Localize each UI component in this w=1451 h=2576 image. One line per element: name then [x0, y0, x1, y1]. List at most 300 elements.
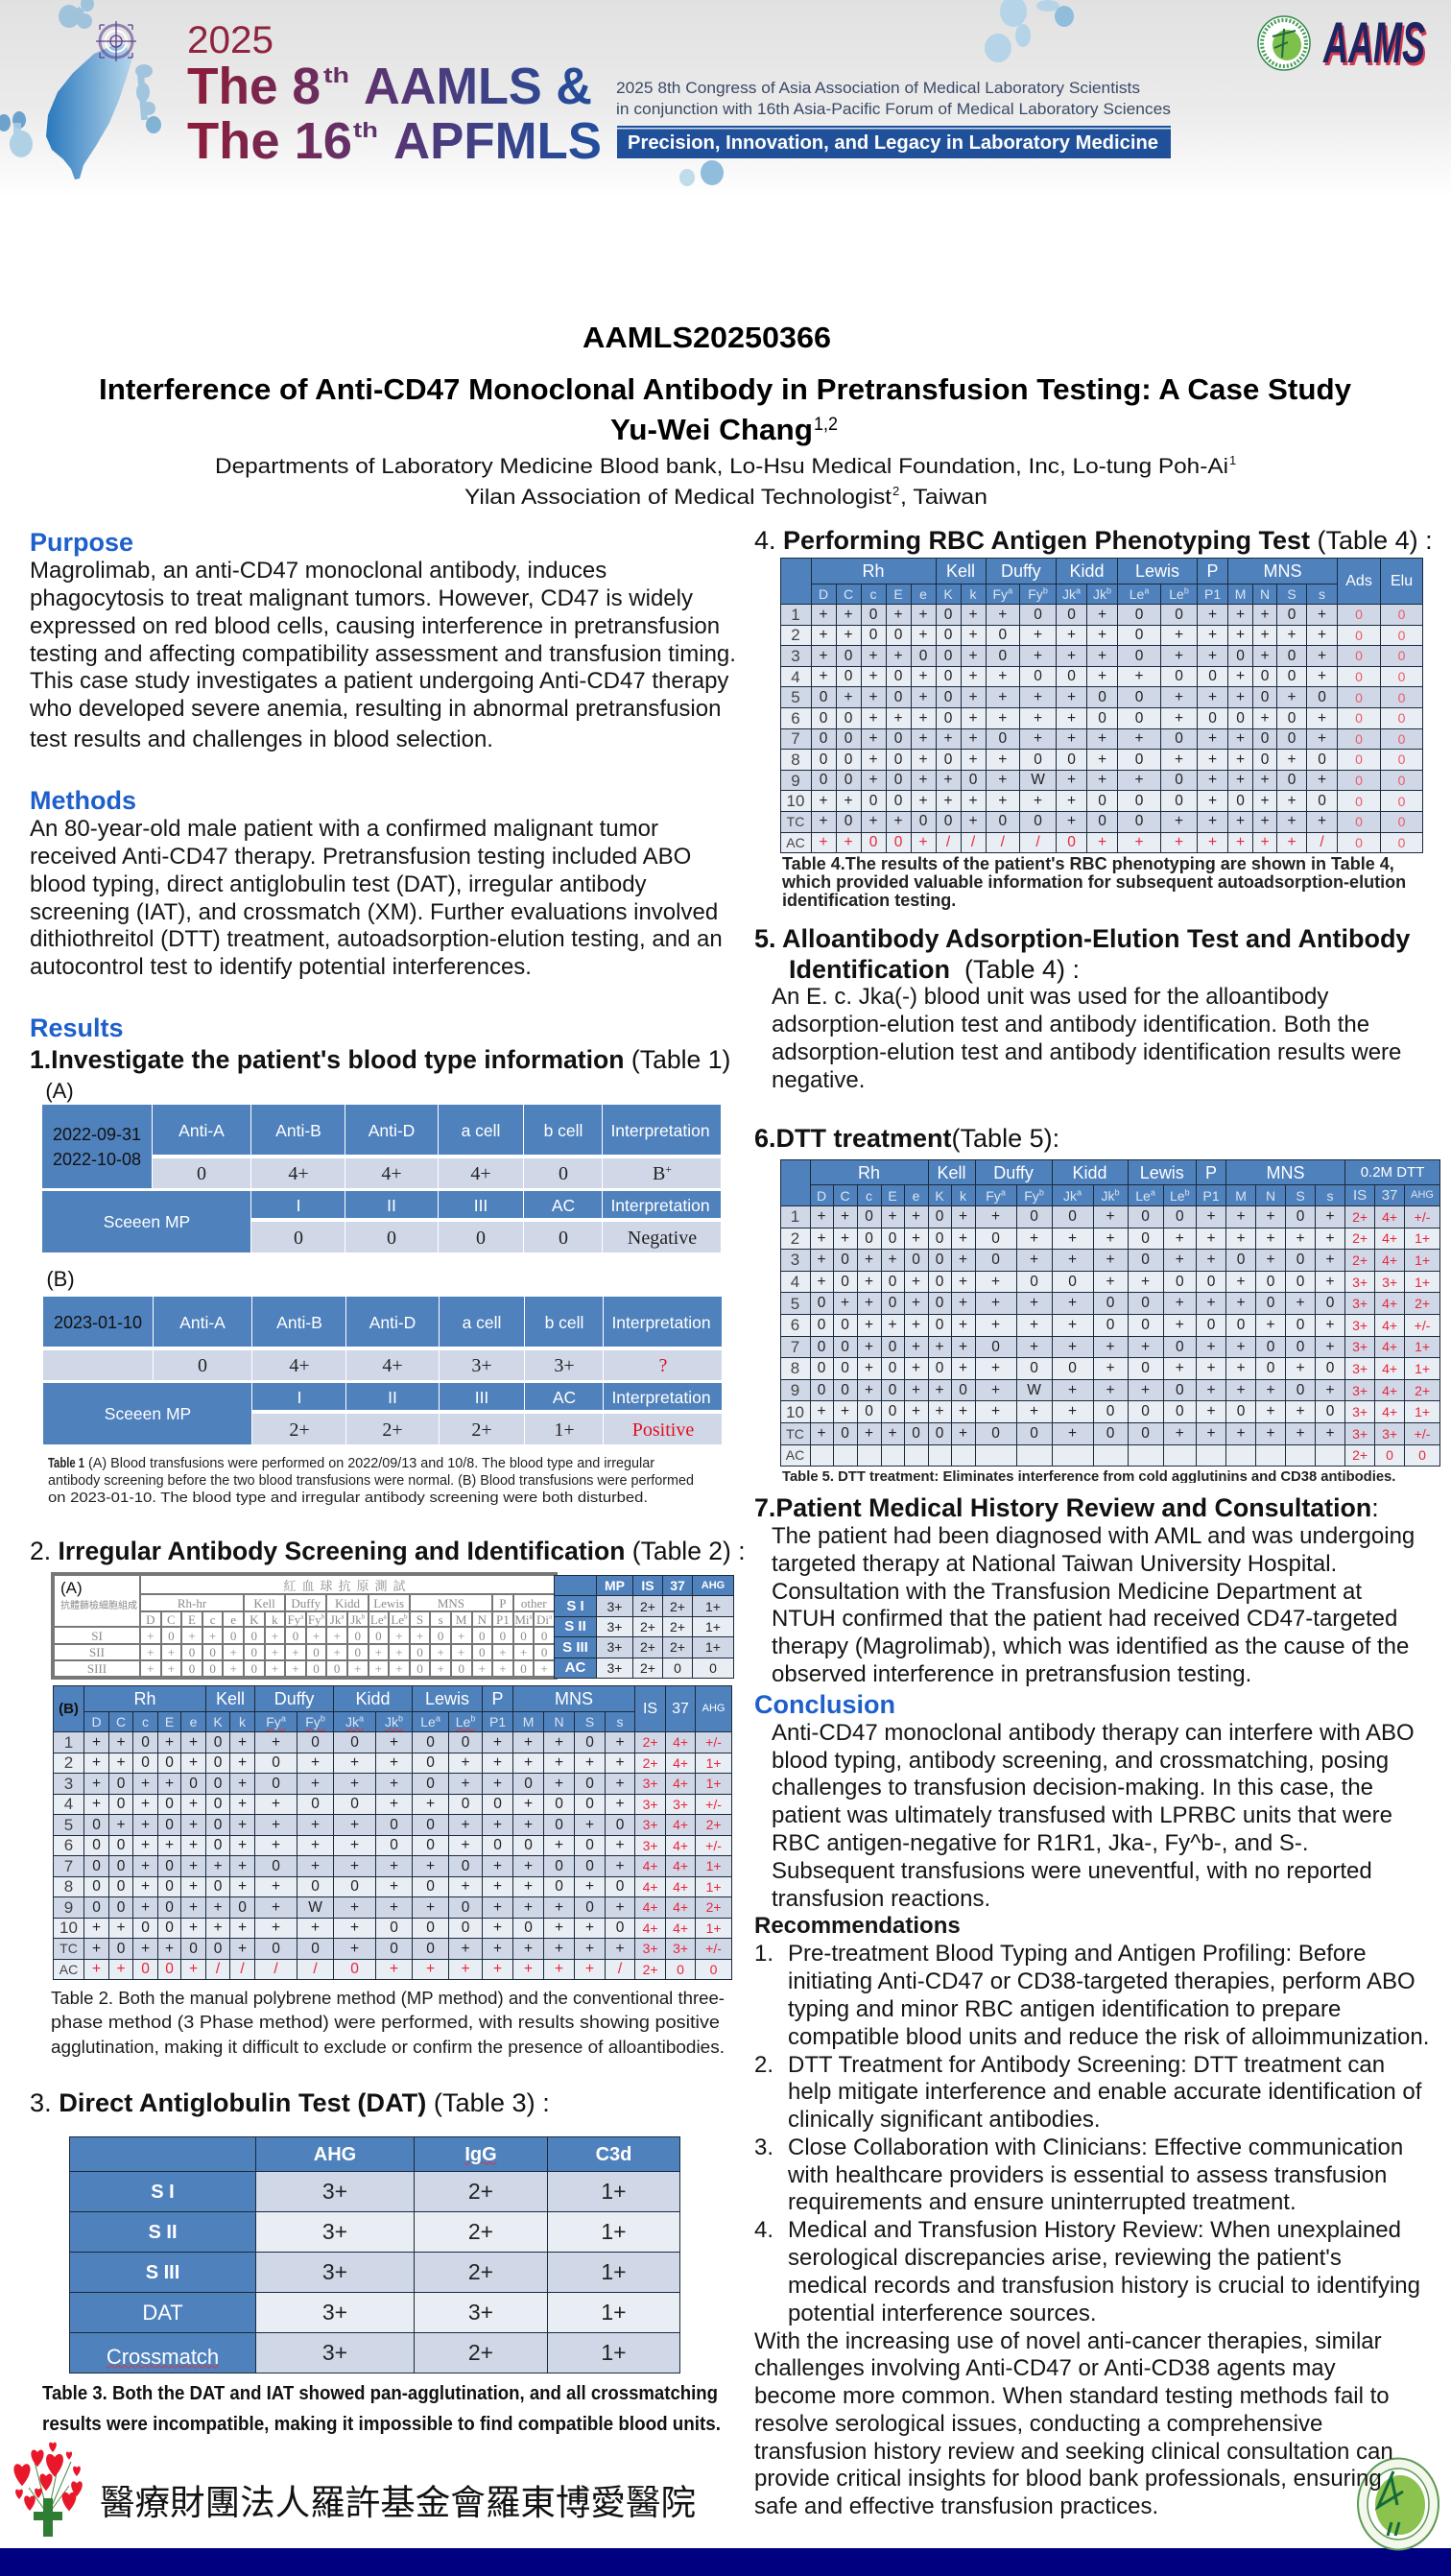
- table 4: RBC antigen phenotyping: +: [1175, 627, 1183, 643]
- table 4: RBC antigen phenotyping: 0: [944, 689, 952, 705]
- table 2B: antibody identification panel: 2+: [643, 1962, 658, 1977]
- text: closing paragraph: become more common. When standard testing methods fail to: [754, 2383, 1390, 2409]
- table 4: RBC antigen phenotyping: 0: [1398, 710, 1405, 726]
- affiliations: Yilan Association of Medical Technologist: [464, 485, 892, 509]
- table 5: DTT treatment: +: [1326, 1252, 1335, 1268]
- table 4: RBC antigen phenotyping: /: [971, 834, 975, 850]
- table 4: RBC antigen phenotyping: 0: [1135, 813, 1143, 829]
- table 2B: antibody identification panel: +: [555, 1776, 563, 1791]
- table 1B: 2023-01-10: [54, 1313, 142, 1332]
- theme banner: [617, 126, 1171, 158]
- table 4: RBC antigen phenotyping: +: [1175, 648, 1183, 664]
- table 5: DTT treatment: 0: [1267, 1339, 1274, 1355]
- table 4: RBC antigen phenotyping: 0: [820, 689, 827, 705]
- table 2A: screening cell results: 2+: [670, 1599, 685, 1614]
- table 2B: antibody identification panel: 0: [165, 1816, 174, 1833]
- table 2B: antibody identification panel: +: [116, 1816, 126, 1833]
- table 3: direct antiglobulin test: AHG: [314, 2144, 356, 2165]
- table 2B: antibody identification panel: 0: [710, 1962, 717, 1977]
- table 4: RBC antigen phenotyping: 6: [791, 709, 800, 727]
- table 5: DTT treatment: 0: [936, 1208, 943, 1225]
- table 2B: antibody identification panel: +: [272, 1796, 280, 1812]
- table 4: RBC antigen phenotyping: D: [819, 586, 828, 602]
- table 3: direct antiglobulin test: DAT: [142, 2300, 183, 2325]
- table 4: RBC antigen phenotyping: +: [844, 627, 853, 643]
- table 5: DTT treatment: +: [1106, 1230, 1115, 1247]
- table 5: DTT treatment: +: [912, 1208, 920, 1225]
- table 4: RBC antigen phenotyping: 0: [919, 648, 927, 664]
- table 5: DTT treatment: 1+: [1415, 1275, 1430, 1290]
- table 4: RBC antigen phenotyping: 0: [844, 710, 852, 727]
- table 2B: antibody identification panel: 0: [214, 1796, 222, 1812]
- table 4: RBC antigen phenotyping: 0: [894, 793, 902, 809]
- table 5: DTT treatment: +: [1267, 1252, 1275, 1268]
- recommendation 3: Close Collaboration with Clinicians: Effective communication: [788, 2135, 1403, 2160]
- table 5: DTT treatment: +: [865, 1339, 873, 1355]
- table 5: DTT treatment: Lea: [1135, 1187, 1155, 1204]
- table 4: RBC antigen phenotyping: 0: [998, 648, 1007, 664]
- table 2B: antibody identification panel: +: [524, 1816, 533, 1833]
- table 2B: antibody identification panel: +: [92, 1941, 101, 1956]
- text: conclusion body: challenges to transfusion decision-making. In this case, the: [772, 1775, 1373, 1801]
- table 2B: antibody identification panel: TC: [59, 1941, 78, 1956]
- table 2B: antibody identification panel: +: [524, 1878, 533, 1895]
- table 5: DTT treatment: +: [1207, 1425, 1216, 1442]
- table 4: RBC antigen phenotyping: +: [944, 793, 953, 809]
- table 2A: scanned antigen panel: 0: [209, 1645, 216, 1659]
- table 1A: Anti-D: [369, 1121, 415, 1140]
- table 2A: screening cell results: 3+: [607, 1660, 622, 1676]
- table 2A: scanned antigen panel: +: [354, 1661, 361, 1676]
- table 4: RBC antigen phenotyping: +: [1135, 834, 1144, 850]
- text: section 7 body: The patient had been diagnosed with AML and was undergoing: [772, 1523, 1415, 1549]
- table 4: RBC antigen phenotyping: 0: [1034, 607, 1042, 623]
- table 5: DTT treatment: 0: [1237, 1317, 1245, 1333]
- recommendation 4: [754, 2217, 1420, 2326]
- table 5: DTT treatment: +: [1176, 1360, 1184, 1376]
- icon: Taiwan island: [46, 44, 132, 179]
- table 5: DTT treatment: MNS: [1267, 1163, 1305, 1182]
- table 2B: antibody identification panel: 0: [524, 1776, 533, 1791]
- table 5: DTT treatment: 4+: [1382, 1361, 1397, 1376]
- table 2A: screening cell results: 3+: [607, 1639, 622, 1655]
- table 4: RBC antigen phenotyping: +: [868, 751, 878, 768]
- table 2B: antibody identification panel: 0: [426, 1776, 435, 1791]
- table 2B: antibody identification panel: 0: [214, 1837, 222, 1853]
- author: Yu-Wei Chang: [610, 414, 813, 446]
- table 4: RBC antigen phenotyping: 0: [944, 607, 952, 623]
- table 4: RBC antigen phenotyping: 0: [1208, 668, 1217, 684]
- table 5: DTT treatment: +: [1237, 1360, 1246, 1376]
- table 4: RBC antigen phenotyping: +: [1067, 730, 1076, 747]
- table 2B: antibody identification panel: +: [390, 1878, 398, 1895]
- table 2A: scanned antigen panel: +: [437, 1645, 444, 1659]
- table 5: DTT treatment: +: [959, 1230, 967, 1247]
- table 4: RBC antigen phenotyping: +: [1288, 813, 1296, 829]
- table 2B: antibody identification panel: +: [92, 1733, 101, 1751]
- table 2B: antibody identification panel: +: [493, 1920, 502, 1936]
- table 3: direct antiglobulin test: 2+: [468, 2219, 493, 2244]
- table 4: RBC antigen phenotyping: 0: [1067, 607, 1076, 623]
- table 2B: antibody identification panel: +: [616, 1858, 625, 1873]
- table 1A: Anti-B: [275, 1121, 321, 1140]
- table 2B: antibody identification panel: +: [189, 1878, 198, 1895]
- table 2B: antibody identification panel: 0: [555, 1878, 563, 1895]
- table 5: DTT treatment: 0: [1296, 1252, 1304, 1268]
- table 4: RBC antigen phenotyping: C: [844, 586, 853, 602]
- table 4: RBC antigen phenotyping: 0: [1098, 710, 1106, 727]
- table 5: DTT treatment: 0: [865, 1208, 873, 1225]
- table 2B: antibody identification panel: +: [524, 1754, 533, 1771]
- table 2B: antibody identification panel: +: [616, 1796, 625, 1812]
- table 4: RBC antigen phenotyping: +: [1098, 668, 1106, 684]
- table 2B: antibody identification panel: +: [141, 1941, 150, 1956]
- table 5: DTT treatment: 0: [1326, 1403, 1334, 1419]
- table 2B: antibody identification panel: +: [92, 1920, 101, 1936]
- table 5: DTT treatment: +: [1030, 1230, 1038, 1247]
- table 2B: antibody identification panel: +: [524, 1898, 533, 1916]
- table 1B: I: [297, 1388, 301, 1407]
- table 2B: antibody identification panel: 4+: [673, 1920, 688, 1936]
- table 2B: antibody identification panel: +: [311, 1816, 320, 1833]
- table 2B: antibody identification panel: 0: [141, 1961, 150, 1977]
- table 2B: antibody identification panel: Lewis: [425, 1689, 469, 1708]
- table 4: RBC antigen phenotyping: +: [1098, 730, 1106, 747]
- table 1A: 2022-09-31: [53, 1125, 141, 1144]
- table 2B: antibody identification panel: 0: [214, 1941, 222, 1956]
- table 2A: scanned antigen panel: (A): [60, 1579, 83, 1597]
- table 2B: antibody identification panel: 2: [64, 1753, 73, 1772]
- text: methods body: screening (IAT), and crossmatch (XM). Further evaluations involved: [30, 899, 718, 925]
- table 2B: antibody identification panel: +: [350, 1941, 359, 1956]
- table 2A: scanned antigen panel: 0: [251, 1628, 257, 1643]
- text: conclusion body: transfusion reactions.: [772, 1886, 990, 1912]
- table 5: DTT treatment: +: [912, 1382, 920, 1398]
- table 4: RBC antigen phenotyping: +: [969, 813, 978, 829]
- table 4: RBC antigen phenotyping: 0: [1398, 690, 1405, 705]
- table 5: DTT treatment: +/-: [1415, 1209, 1430, 1225]
- table 2A: scanned antigen panel: k: [272, 1612, 278, 1626]
- table 2A: scanned antigen panel: Rh-hr: [178, 1595, 206, 1610]
- table 5: DTT treatment: +: [1326, 1425, 1335, 1442]
- table 4: RBC antigen phenotyping: 0: [844, 730, 852, 747]
- table 5: DTT treatment: +: [865, 1382, 873, 1398]
- table 4: RBC antigen phenotyping: 0: [1318, 793, 1326, 809]
- table 2B: antibody identification panel: +: [493, 1754, 502, 1771]
- table 2A: scanned antigen panel: 0: [416, 1645, 423, 1659]
- table 4: RBC antigen phenotyping: +: [1034, 689, 1042, 705]
- table 5: DTT treatment: +: [912, 1403, 920, 1419]
- table 2A: scanned antigen panel: SI: [91, 1628, 103, 1643]
- table 2A: scanned antigen panel: S: [416, 1612, 423, 1626]
- table 2B: antibody identification panel: 0: [616, 1816, 624, 1833]
- table 2B: antibody identification panel: 0: [585, 1733, 594, 1751]
- table 2B: antibody identification panel: 0: [462, 1898, 469, 1916]
- text: section 5 body: [772, 984, 1401, 1093]
- heading: section 2: 2. Irregular Antibody Screening and Identification (Table 2) :: [30, 1537, 746, 1565]
- table 2B: antibody identification panel: +: [350, 1816, 359, 1833]
- table 1A: AC: [552, 1196, 575, 1215]
- table 5: DTT treatment: +: [1237, 1339, 1246, 1355]
- table 1B: 3+: [471, 1355, 492, 1376]
- table 2B: antibody identification panel: 0: [350, 1796, 359, 1812]
- table 5: DTT treatment: 0: [1207, 1317, 1215, 1333]
- table 4: RBC antigen phenotyping: +: [1135, 668, 1144, 684]
- table 4: RBC antigen phenotyping: +: [1208, 772, 1217, 788]
- table 5: DTT treatment: 0: [1176, 1382, 1184, 1398]
- table 5: DTT treatment: 0: [936, 1230, 943, 1247]
- table 1A: +: [665, 1162, 672, 1176]
- table 4: RBC antigen phenotyping: 8: [791, 751, 800, 769]
- table 2B: antibody identification panel: +: [92, 1796, 101, 1812]
- table 2B: antibody identification panel: 4+: [643, 1920, 658, 1936]
- table 5: DTT treatment: +: [1326, 1317, 1335, 1333]
- recommendation 4: potential interference sources.: [788, 2301, 1097, 2326]
- table 4: RBC antigen phenotyping: W: [1031, 772, 1045, 788]
- table 2B: antibody identification panel: 3+: [643, 1817, 658, 1832]
- table 2B: antibody identification panel: 0: [214, 1776, 222, 1791]
- table 5: DTT treatment: +: [1326, 1230, 1335, 1247]
- table 5: DTT treatment: +: [1068, 1425, 1077, 1442]
- table 5: DTT treatment: +: [991, 1382, 1000, 1398]
- table 2A: scanned antigen panel: 0: [354, 1628, 361, 1643]
- table 2B: antibody identification panel: +: [238, 1878, 247, 1895]
- heading: section 5: [754, 924, 1411, 984]
- table 2B: antibody identification panel: 0: [214, 1754, 222, 1771]
- table 4: RBC antigen phenotyping: +: [969, 648, 978, 664]
- table 4: RBC antigen phenotyping: 0: [1135, 689, 1143, 705]
- table 5: DTT treatment: +: [1068, 1339, 1077, 1355]
- table 2A: screening cell results: 2+: [640, 1619, 655, 1634]
- table 2B: antibody identification panel: 4+: [673, 1755, 688, 1771]
- table 2A: scanned antigen panel: +: [437, 1661, 444, 1676]
- table 2A: scanned antigen panel: 0: [479, 1628, 486, 1643]
- table 4: RBC antigen phenotyping: +: [868, 710, 878, 727]
- table 5: DTT treatment: 3+: [1352, 1296, 1368, 1311]
- recommendation 2: clinically significant antibodies.: [788, 2107, 1100, 2133]
- table 2A: scanned antigen panel: +: [230, 1661, 237, 1676]
- table 2B: antibody identification panel: /: [313, 1961, 318, 1977]
- text: section 5 body: adsorption-elution test and antibody identification results were: [772, 1039, 1401, 1065]
- table 2B: antibody identification panel: 4+: [673, 1899, 688, 1915]
- table 5: DTT treatment: W: [1027, 1382, 1041, 1398]
- table 2A: scanned antigen panel: [53, 1574, 556, 1678]
- table 5: DTT treatment: 1+: [1415, 1252, 1430, 1268]
- table 2A: scanned antigen panel: SII: [89, 1645, 105, 1659]
- table 4: RBC antigen phenotyping: 0: [1355, 814, 1363, 829]
- table 5: DTT treatment: 8: [791, 1359, 799, 1377]
- table 4: RBC antigen phenotyping: +: [918, 668, 928, 684]
- title block: [99, 321, 1351, 509]
- table 1B: Sceeen MP: [105, 1404, 191, 1423]
- table 4: RBC antigen phenotyping: +: [1034, 710, 1042, 727]
- table 5: DTT treatment: +: [959, 1317, 967, 1333]
- table 2B: antibody identification panel: +/-: [705, 1941, 722, 1956]
- table 4: RBC antigen phenotyping: +: [868, 772, 878, 788]
- table 2A: scanned antigen panel: 抗體篩檢細胞組成: [60, 1597, 137, 1611]
- table 2B: antibody identification panel: +: [92, 1961, 101, 1977]
- table 4: RBC antigen phenotyping: 9: [791, 772, 800, 790]
- conference year: 2025: [187, 19, 274, 61]
- table 2B: antibody identification panel: +: [585, 1920, 594, 1936]
- table 4: RBC antigen phenotyping: 0: [1135, 648, 1143, 664]
- table 2B: antibody identification panel: +: [116, 1920, 126, 1936]
- table 4: RBC antigen phenotyping: 5: [791, 688, 800, 706]
- table 4: RBC antigen phenotyping: +: [1318, 648, 1326, 664]
- table 2B: antibody identification panel: +: [238, 1796, 247, 1812]
- table 2A: scanned antigen panel: +: [272, 1628, 278, 1643]
- text: section 7 body: NTUH confirmed that the patient had received CD47-targeted: [772, 1606, 1397, 1632]
- table 4: RBC antigen phenotyping: 0: [1398, 607, 1405, 622]
- table 5: DTT treatment: 4+: [1382, 1209, 1397, 1225]
- table 4: RBC antigen phenotyping: +: [1318, 668, 1326, 684]
- table 4: RBC antigen phenotyping: 0: [1398, 648, 1405, 663]
- table 4: RBC antigen phenotyping: 0: [1175, 607, 1183, 623]
- table 2B: antibody identification panel: 0: [350, 1961, 359, 1977]
- table 4: RBC antigen phenotyping: +: [868, 730, 878, 747]
- table 2A: scanned antigen panel: E: [188, 1612, 196, 1626]
- table 5: DTT treatment: 1+: [1415, 1339, 1430, 1354]
- heading: section 1: 1.Investigate the patient's blood type information (Table 1): [30, 1045, 730, 1074]
- table 2A: screening cell results: AHG: [702, 1580, 725, 1591]
- table 4: RBC antigen phenotyping: +: [819, 627, 828, 643]
- affiliations: [215, 453, 1236, 509]
- table 4: RBC antigen phenotyping: Jkb: [1093, 585, 1111, 602]
- table 1A: Anti-A: [178, 1121, 225, 1140]
- recommendation 3: requirements and ensure uninterrupted treatment.: [788, 2189, 1296, 2215]
- table 2A: scanned antigen panel: 0: [189, 1661, 195, 1676]
- table 5: DTT treatment: +: [991, 1317, 1000, 1333]
- table 2B: antibody identification panel: 0: [426, 1816, 435, 1833]
- table 4: RBC antigen phenotyping: /: [1035, 834, 1040, 850]
- text: methods body: autocontrol test to identify potential interferences.: [30, 954, 532, 980]
- table 5: DTT treatment: +: [959, 1208, 967, 1225]
- table 5: DTT treatment: 0: [1267, 1295, 1274, 1311]
- table 2B: antibody identification panel: 0: [390, 1816, 398, 1833]
- table 5: DTT treatment: 10: [786, 1403, 804, 1421]
- table 5: DTT treatment: +: [841, 1230, 849, 1247]
- table 5: DTT treatment: 2+: [1415, 1383, 1430, 1398]
- table 4: RBC antigen phenotyping: 0: [1355, 669, 1363, 684]
- table 3: direct antiglobulin test: Crossmatch: [107, 2344, 219, 2369]
- table 2B: antibody identification panel: 0: [524, 1837, 533, 1853]
- table 5: DTT treatment: 0: [889, 1360, 896, 1376]
- table 2B: antibody identification panel: 37: [672, 1701, 689, 1716]
- table 4: RBC antigen phenotyping: +: [1098, 607, 1106, 623]
- table 4: RBC antigen phenotyping: 0: [1098, 793, 1106, 809]
- table 2B: antibody identification panel: +: [92, 1754, 101, 1771]
- table 5: DTT treatment: 0: [1386, 1447, 1393, 1463]
- table 2B: antibody identification panel: e: [190, 1714, 197, 1729]
- table 2A: scanned antigen panel: other: [521, 1595, 547, 1610]
- recommendation 1: initiating Anti-CD47 or CD38-targeted therapies, perform ABO: [788, 1968, 1415, 1994]
- table 5: DTT treatment: 2+: [1415, 1296, 1430, 1311]
- table 4: RBC antigen phenotyping: +: [1067, 648, 1076, 664]
- table 5: DTT treatment: 4+: [1382, 1383, 1397, 1398]
- table 3: direct antiglobulin test: 2+: [468, 2340, 493, 2365]
- table 2B: antibody identification panel: +: [189, 1816, 198, 1833]
- text: conclusion body: blood typing, antibody screening, and crossmatching, posing: [772, 1748, 1389, 1774]
- table 4 caption: which provided valuable information for subsequent autoadsorption-elution: [782, 872, 1406, 892]
- table 2B: antibody identification panel: +: [141, 1858, 150, 1873]
- table 5: DTT treatment: +: [959, 1274, 967, 1290]
- table 2B: antibody identification panel: Lea: [420, 1713, 440, 1729]
- table 5: DTT treatment: 0: [818, 1382, 825, 1398]
- text: section 5 body: An E. c. Jka(-) blood unit was used for the alloantibody: [772, 984, 1328, 1010]
- table 2B: antibody identification panel: 0: [462, 1733, 469, 1751]
- table 4: RBC antigen phenotyping: +: [819, 648, 828, 664]
- table 5: DTT treatment: 0: [1030, 1360, 1038, 1376]
- text: closing paragraph: resolve serological issues, conducting a comprehensive: [754, 2411, 1322, 2437]
- table 2A: scanned antigen panel: e: [230, 1612, 236, 1626]
- table 5: DTT treatment: 4+: [1382, 1230, 1397, 1246]
- table 4: RBC antigen phenotyping: 0: [894, 772, 902, 788]
- table 2B: antibody identification panel: +: [141, 1878, 150, 1895]
- table 5: DTT treatment: +: [1237, 1425, 1246, 1442]
- table 5: DTT treatment: +: [1207, 1230, 1216, 1247]
- table 4: RBC antigen phenotyping: +: [918, 607, 928, 623]
- abstract number: AAMLS20250366: [583, 321, 831, 354]
- table 5: DTT treatment: +: [1207, 1252, 1216, 1268]
- table 5: DTT treatment: +: [912, 1274, 920, 1290]
- table 4: RBC antigen phenotyping: +: [969, 710, 978, 727]
- table 4: RBC antigen phenotyping: 0: [1067, 751, 1076, 768]
- table 4: RBC antigen phenotyping: 0: [894, 627, 902, 643]
- table 2B: antibody identification panel: 0: [585, 1796, 594, 1812]
- table 2B: antibody identification panel: +: [616, 1837, 625, 1853]
- table 4: RBC antigen phenotyping: +: [1261, 813, 1270, 829]
- table 2B: antibody identification panel: 6: [64, 1836, 73, 1854]
- table 4: RBC antigen phenotyping: 0: [820, 772, 827, 788]
- table 2B: antibody identification panel: S: [585, 1714, 594, 1729]
- table 2B: antibody identification panel: 1+: [706, 1776, 722, 1791]
- table 5: DTT treatment: 0: [1068, 1208, 1077, 1225]
- table 2B: antibody identification panel: +: [350, 1837, 359, 1853]
- table 2A: scanned antigen panel: Kidd: [335, 1595, 360, 1610]
- conference name: AAMLS &: [364, 58, 592, 115]
- table 2A: scanned antigen panel: s: [439, 1612, 443, 1626]
- table 4: RBC antigen phenotyping: +: [998, 689, 1007, 705]
- table 2B: antibody identification panel: 3+: [643, 1797, 658, 1812]
- table 4: RBC antigen phenotyping: +: [868, 668, 878, 684]
- table 2B: antibody identification panel: 4+: [643, 1858, 658, 1873]
- table 2B: antibody identification panel: +: [350, 1754, 359, 1771]
- table 5: DTT treatment: +: [1326, 1208, 1335, 1225]
- table 2B: antibody identification panel: 0: [214, 1878, 222, 1895]
- poster title: Interference of Anti-CD47 Monoclonal Antibody in Pretransfusion Testing: A Case Study: [99, 373, 1351, 406]
- table 4: RBC antigen phenotyping: 0: [919, 813, 927, 829]
- table 2B: antibody identification panel: 10: [59, 1919, 78, 1937]
- table 2 caption: agglutination, making it difficult to exclude or confirm the presence of alloantibodies.: [51, 2037, 725, 2057]
- table 5: DTT treatment: 0: [991, 1425, 1000, 1442]
- table 2B: antibody identification panel: +: [350, 1898, 359, 1916]
- table 2B: antibody identification panel: +: [238, 1816, 247, 1833]
- table 5: DTT treatment: +: [1106, 1208, 1115, 1225]
- table 1: blood type panels A and B: [42, 1079, 722, 1506]
- table 1 caption: on 2023-01-10. The blood type and irregular antibody screening were both disturbed.: [48, 1490, 648, 1506]
- table 2B: antibody identification panel: +: [189, 1837, 198, 1853]
- table 5: DTT treatment: +: [959, 1403, 967, 1419]
- table 2B: antibody identification panel: +: [141, 1776, 150, 1791]
- table 4: RBC antigen phenotyping: +: [1034, 730, 1042, 747]
- heading: Methods: Methods: [30, 786, 136, 815]
- table 2A: scanned antigen panel: 0: [500, 1628, 506, 1643]
- text: conclusion body: patient was ultimately transfused with LPRBC units that were: [772, 1802, 1392, 1828]
- table 5: DTT treatment: +: [1207, 1295, 1216, 1311]
- table 2A: scanned antigen panel: Mia: [514, 1612, 533, 1626]
- table 4: RBC antigen phenotyping: 0: [1355, 731, 1363, 747]
- table 4: RBC antigen phenotyping: +: [819, 793, 828, 809]
